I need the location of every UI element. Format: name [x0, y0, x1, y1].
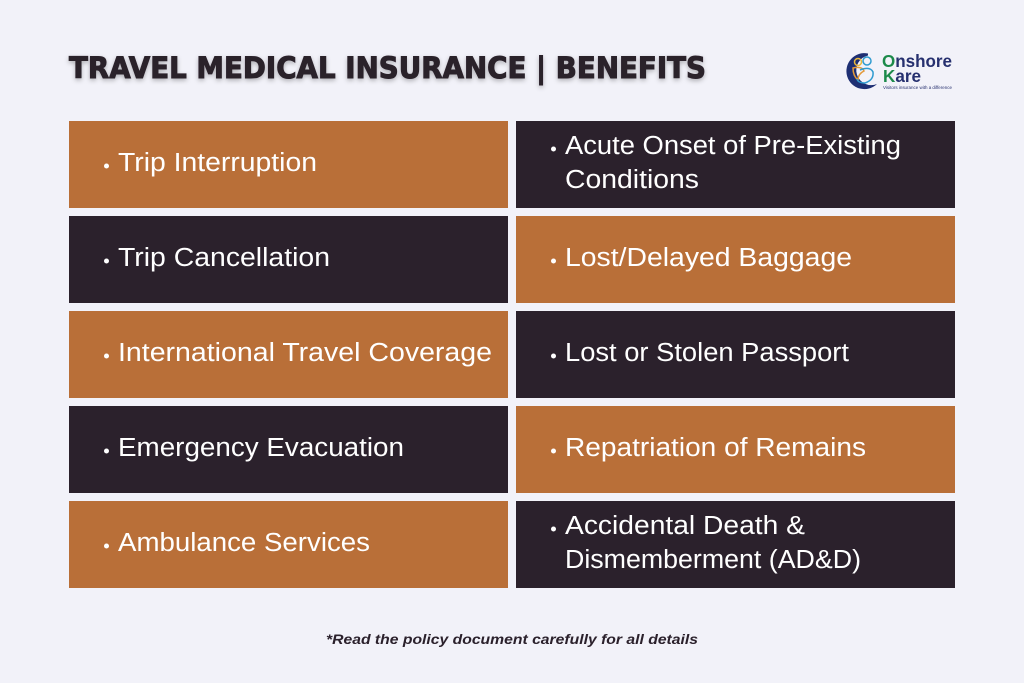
logo tagline: Visitors insurance with a difference [883, 85, 952, 90]
title: TRAVEL MEDICAL INSURANCE | BENEFITS [69, 51, 706, 85]
panel: Repatriation of Remains: Repatriation of Remains [565, 434, 866, 462]
panel: Lost or Stolen Passport: Lost or Stolen Passport [565, 339, 849, 367]
panel: Accidental Death & Dismemberment: Accidental Death & [565, 512, 805, 540]
panel: Trip Interruption [69, 121, 508, 208]
panel: Trip Cancellation: Trip Cancellation [118, 244, 330, 272]
panel: Ambulance Services: Ambulance Services [118, 529, 370, 557]
panel: Trip Cancellation [69, 216, 508, 303]
panel: Trip Interruption: Trip Interruption [118, 149, 317, 177]
panel: Acute Onset of Pre-Existing Conditions [516, 121, 955, 208]
panel: Emergency Evacuation [69, 406, 508, 493]
panel: International Travel Coverage [69, 311, 508, 398]
panel: International Travel Coverage: International Travel Coverage [118, 339, 492, 367]
footnote: *Read the policy document carefully for all details [326, 631, 698, 647]
panel: Ambulance Services [69, 501, 508, 588]
panel: Acute Onset of Pre-Existing Conditions: Conditions [565, 166, 699, 194]
logo name: Onshore [882, 51, 952, 71]
logo name second line: Kare [883, 66, 921, 86]
logo icon [846, 53, 877, 89]
panel: Repatriation of Remains [516, 406, 955, 493]
panel: Acute Onset of Pre-Existing Conditions: Acute Onset of Pre-Existing [565, 132, 901, 160]
panel: Emergency Evacuation: Emergency Evacuation [118, 434, 404, 462]
panel: Accidental Death & Dismemberment [516, 501, 955, 588]
panel: Accidental Death & Dismemberment: Dismemberment (AD&D) [565, 546, 861, 574]
logo: Onshore Kare [846, 51, 952, 90]
panel: Lost or Stolen Passport [516, 311, 955, 398]
panel: Lost/Delayed Baggage [516, 216, 955, 303]
panel: Lost/Delayed Baggage: Lost/Delayed Baggage [565, 244, 852, 272]
